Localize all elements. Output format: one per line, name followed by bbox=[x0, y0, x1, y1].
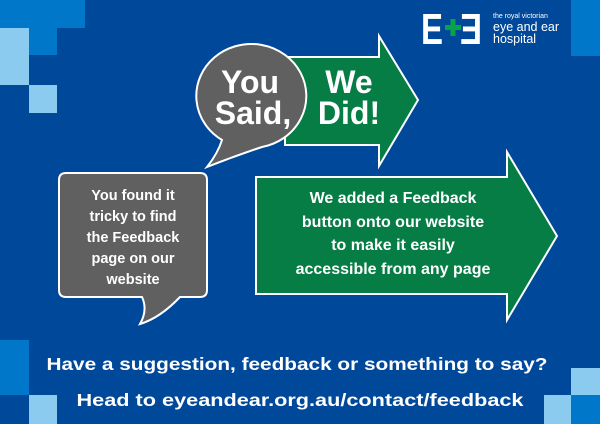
speech box: you found it tricky: page on our bbox=[92, 251, 175, 267]
speech bubble: You Said bbox=[196, 44, 306, 167]
speech box: you found it tricky: tricky to find bbox=[89, 209, 177, 225]
call to action text: Have a suggestion, feedback or something to say? bbox=[46, 354, 548, 374]
speech bubble: You Said: Said, bbox=[215, 95, 291, 131]
speech box: you found it tricky: website bbox=[105, 272, 160, 288]
speech box: you found it tricky bbox=[59, 173, 207, 324]
decorative squares bottom bbox=[0, 340, 600, 424]
arrow: We Did bbox=[285, 36, 418, 166]
call to action text: Head to eyeandear.org.au/contact/feedback bbox=[76, 390, 524, 410]
logo: E bbox=[460, 5, 482, 54]
speech box: you found it tricky: You found it bbox=[91, 188, 175, 204]
arrow: we added feedback button: accessible from any page bbox=[296, 261, 490, 278]
logo: E bbox=[421, 5, 443, 54]
call to action text bbox=[46, 354, 548, 410]
arrow: we added feedback button: We added a Feedback bbox=[310, 190, 477, 207]
arrow: We Did: Did! bbox=[318, 95, 380, 131]
arrow: we added feedback button: to make it easily bbox=[331, 237, 455, 254]
speech bubble: You Said: You bbox=[221, 64, 279, 100]
logo bbox=[421, 5, 559, 54]
decorative squares top-left bbox=[0, 0, 85, 113]
logo: hospital bbox=[493, 32, 536, 46]
speech box: you found it tricky: the Feedback bbox=[87, 230, 180, 246]
logo: the royal victorian bbox=[493, 13, 548, 20]
logo: eye and ear bbox=[493, 20, 559, 34]
decorative square top-right bbox=[571, 0, 600, 56]
arrow: we added feedback button bbox=[256, 152, 557, 320]
arrow: We Did: We bbox=[325, 64, 373, 100]
arrow: we added feedback button: button onto our website bbox=[302, 214, 484, 231]
